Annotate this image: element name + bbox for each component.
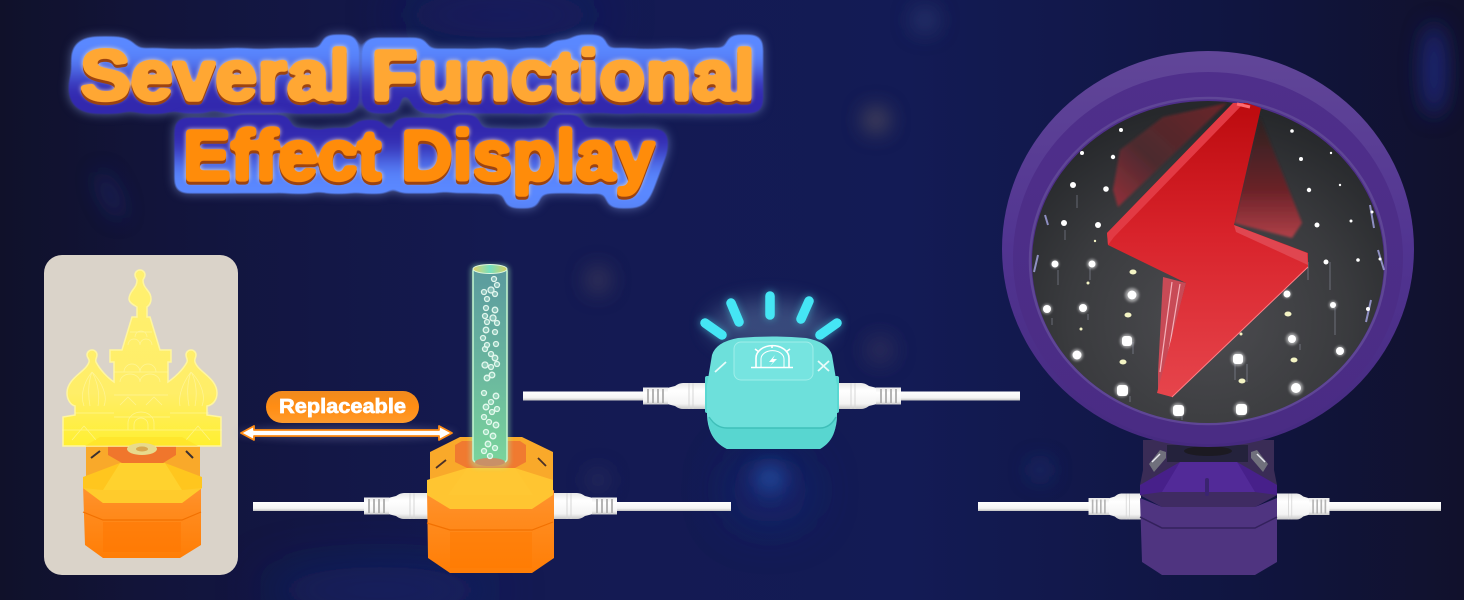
LED lights <box>1034 128 1384 420</box>
cable left <box>523 392 643 400</box>
arrow: double headed replaceable arrow <box>236 426 456 440</box>
teal alarm module with cables <box>523 296 1020 449</box>
bubble tube <box>470 264 510 468</box>
cable left <box>978 502 1090 511</box>
cable right <box>1328 502 1441 511</box>
label text: Replaceable <box>279 396 406 418</box>
panel: replaceable castle module <box>44 255 238 575</box>
castle base disc <box>127 443 157 455</box>
purple ring <box>1002 51 1414 447</box>
cable right <box>616 502 731 511</box>
orange base module <box>83 445 202 558</box>
icon: yellow castle light panel <box>62 270 222 455</box>
base body <box>427 490 554 573</box>
purple base <box>1140 440 1277 575</box>
purple infinity mirror module <box>978 51 1441 575</box>
cable right <box>901 392 1020 400</box>
cable left <box>253 502 367 511</box>
alarm button <box>734 342 813 380</box>
orange module with cables <box>253 264 731 573</box>
title line 2: Effect Display <box>183 117 656 196</box>
infinity mirror <box>1032 101 1384 423</box>
title line 1: Several Functional <box>80 37 755 116</box>
glow rays <box>705 296 837 351</box>
base yellow cap <box>427 468 553 509</box>
title <box>80 37 755 196</box>
pill <box>266 391 419 423</box>
base top <box>430 437 553 490</box>
teal body <box>705 376 711 413</box>
icon: alarm bolt <box>751 345 793 368</box>
replaceable label <box>266 391 419 423</box>
red reflections <box>1113 103 1302 393</box>
icon: red lightning bolt <box>1107 103 1308 397</box>
